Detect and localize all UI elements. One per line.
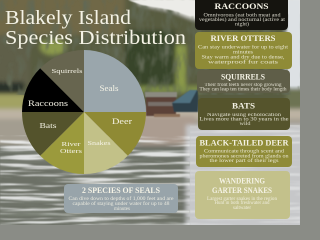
- heading: squirrels: SQUIRRELS: [221, 72, 266, 82]
- text: deer facts: [200, 150, 289, 164]
- text: otter facts: waterproof fur coats: [208, 60, 278, 66]
- heading: wandering garter snakes: GARTER SNAKES: [212, 186, 272, 195]
- label: squirrels: Squirrels: [52, 69, 83, 75]
- slice: snakes: [84, 112, 128, 174]
- slice: deer: [84, 112, 146, 156]
- text: raccoon facts: vegetables) and nocturnal (active at: [199, 18, 286, 23]
- heading: 2 species of seals: 2 SPECIES OF SEALS: [82, 186, 161, 195]
- heading: wandering garter snakes: [212, 176, 272, 195]
- panel: wandering garter snakes: [195, 171, 290, 219]
- text: bat facts: [200, 113, 288, 127]
- text: seal facts: Can dive down to depths of 1,000 feet and are: [68, 197, 174, 202]
- text: otter facts: Stay warm and dry due to dense,: [202, 56, 284, 60]
- text: deer facts: Communicate through scent and: [204, 150, 285, 154]
- icon: lakeside cabins: [145, 90, 198, 117]
- label: snakes: Snakes: [88, 140, 111, 147]
- label: seals: Seals: [100, 84, 118, 93]
- slice: raccoons: [22, 68, 84, 112]
- title: [5, 7, 186, 49]
- text: bat facts: wild: [240, 122, 251, 127]
- text: bat facts: Lives more than to 30 years in the: [200, 118, 288, 122]
- text: seal facts: minutes: [114, 207, 130, 212]
- text: snake facts: Largest garter snakes in the region: [207, 197, 278, 202]
- panel: bats: [198, 98, 290, 130]
- title: Blakely Island: [5, 7, 131, 29]
- heading: raccoons: RACCOONS: [214, 2, 269, 11]
- label: river otters: [60, 141, 83, 155]
- label: bats: Bats: [40, 121, 57, 130]
- heading: bats: BATS: [232, 102, 256, 110]
- text: otter facts: Can stay underwater for up to eight: [198, 46, 289, 50]
- slice: squirrels: [40, 50, 84, 112]
- label: raccoons: Raccoons: [28, 99, 68, 108]
- panel: river otters: [195, 32, 292, 69]
- text: otter facts: [198, 46, 289, 66]
- label: river otters: Otters: [60, 148, 83, 155]
- panel: 2 species of seals: [64, 184, 178, 213]
- text: squirrel facts: Their front teeth never stop growing: [204, 83, 282, 88]
- text: snake facts: Hunt in both freshwater and: [214, 201, 270, 206]
- text: raccoon facts: [199, 14, 286, 28]
- panel: raccoons: [195, 0, 288, 30]
- text: otter facts: minutes: [233, 50, 253, 56]
- label: deer: Deer: [112, 116, 132, 126]
- text: deer facts: the lower part of their legs: [210, 159, 279, 164]
- text: snake facts: saltwater: [233, 206, 251, 211]
- panel: squirrels: [197, 70, 290, 93]
- text: bat facts: Navigate using echolocation: [207, 113, 282, 118]
- label: river otters: River: [62, 141, 82, 148]
- text: raccoon facts: night): [235, 22, 249, 28]
- slice: river otters: [40, 112, 84, 174]
- title: Species Distribution: [5, 27, 186, 49]
- heading: river otters: RIVER OTTERS: [210, 34, 276, 43]
- slice: seals: [84, 50, 146, 112]
- text: seal facts: [68, 197, 174, 212]
- pie chart: species distribution: [22, 50, 146, 174]
- text: squirrel facts: [200, 83, 287, 92]
- text: raccoon facts: Omnivorous (eat both meat and: [204, 14, 281, 18]
- slice: bats: [22, 112, 84, 156]
- panel: black-tailed deer: [196, 136, 292, 167]
- heading: wandering garter snakes: WANDERING: [219, 176, 265, 186]
- text: deer facts: pheromones secreted from glands on: [200, 154, 289, 160]
- text: squirrel facts: They can leap ten times their body length: [200, 88, 287, 92]
- heading: black-tailed deer: BLACK-TAILED DEER: [200, 138, 289, 148]
- text: seal facts: capable of staying under water for up to 48: [72, 202, 170, 207]
- text: snake facts: [207, 197, 278, 211]
